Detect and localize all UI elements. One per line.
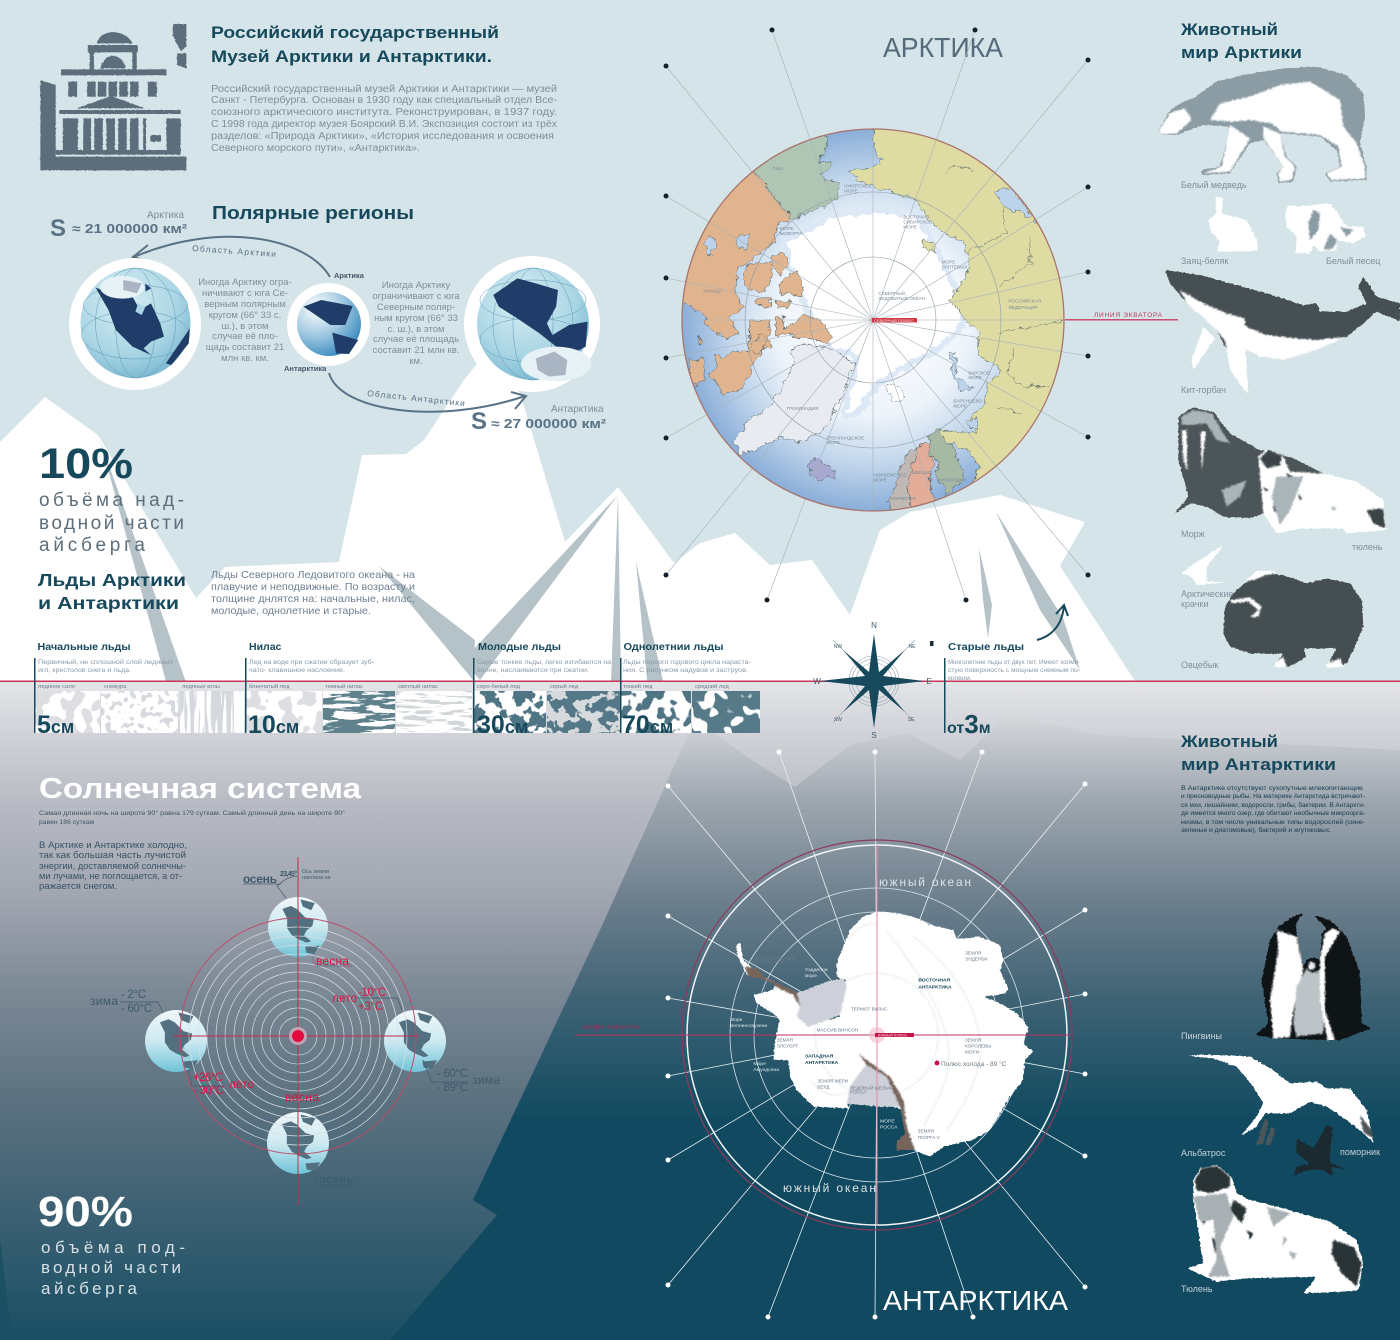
map radial end dots bbox=[664, 28, 1090, 602]
text: arctic boundary left: щадь составит 21 bbox=[206, 342, 284, 353]
heading: antarctic fauna: мир Антарктики bbox=[1181, 755, 1336, 774]
antarctic fauna text: ся мхи, лишайники, водоросли, грибы, бактерии. В Антаркти- bbox=[1181, 801, 1365, 809]
ice column: начальные льды: ледяные иглы bbox=[182, 684, 220, 690]
text: arctic boundary right: ным кругом (66° 33 bbox=[374, 313, 458, 324]
equator line label bbox=[1065, 312, 1178, 320]
map place labels: ВОСТОЧНО- bbox=[903, 214, 931, 219]
ice column: нилас: темный нилас bbox=[325, 683, 363, 690]
label: summer right: лето bbox=[332, 993, 357, 1005]
texture tile: ледяные иглы bbox=[180, 691, 244, 733]
arctic area figure: S bbox=[50, 215, 66, 242]
animal labels: arctic lower: Морж bbox=[1181, 529, 1205, 539]
label: spring bottom: весна bbox=[285, 1090, 319, 1104]
texture tile: средний лед bbox=[692, 691, 760, 733]
animal: arctic tern bbox=[1181, 544, 1235, 585]
ocean labels bbox=[783, 875, 971, 1195]
arctic area figure: Арктика bbox=[147, 210, 184, 221]
label: autumn top bbox=[243, 869, 332, 898]
background: sky above water bbox=[0, 0, 1400, 681]
label: winter right: - 60°C bbox=[437, 1068, 468, 1080]
ice column: молодые льды: 30см bbox=[477, 711, 528, 739]
antarctic title: АНТАРКТИКА bbox=[883, 1285, 1068, 1316]
globe: right bbox=[384, 1010, 446, 1072]
orbit rings bbox=[180, 918, 416, 1154]
map place labels: ЧУКОТСКОЕ bbox=[844, 184, 872, 189]
label: summer right: -10°C bbox=[358, 987, 386, 999]
stat: 90 percent below water bbox=[38, 1188, 185, 1298]
heading: arctic fauna: мир Арктики bbox=[1181, 43, 1302, 62]
map place labels: ЛАПТЕВЫХ bbox=[942, 264, 968, 269]
antarctic place labels: ЗЕМЛЯ bbox=[965, 1038, 981, 1043]
museum description: С 1998 года директор музея Боярский В.И. Экспозиция состоит из трёх bbox=[211, 119, 557, 130]
globe: antarctic view bbox=[464, 256, 600, 392]
antarctic place labels: Море bbox=[730, 1017, 743, 1023]
arctic map bbox=[653, 28, 1093, 602]
antarctic fauna text bbox=[1181, 785, 1365, 834]
globe: arctic view bbox=[69, 258, 201, 390]
solar text paragraph: энергии, доставляемой солнечны- bbox=[39, 861, 186, 872]
antarctic area figure bbox=[471, 404, 607, 435]
label: winter left: зима bbox=[90, 994, 118, 1008]
antarctic place labels: ПОЛУОСТРОВ bbox=[753, 959, 785, 964]
antarctic fauna text: зеленые и диатомовые), бактерий и жгутиковых. bbox=[1181, 826, 1331, 834]
ice column: начальные льды: 5см bbox=[37, 711, 74, 739]
map place labels: НОРВЕЖСКОЕ bbox=[873, 473, 907, 478]
stat: 10 percent above water: 10% bbox=[39, 440, 133, 488]
iceberg above water bbox=[0, 360, 1135, 690]
antarctic place labels: Уэдделла bbox=[805, 967, 828, 973]
label: winter right: зима bbox=[472, 1073, 500, 1087]
antarctic map bbox=[575, 750, 1088, 1320]
arrow: antarctic region bbox=[329, 373, 526, 412]
antarctic place labels: Море bbox=[753, 1061, 766, 1067]
animal labels: antarctic: Альбатрос bbox=[1181, 1148, 1226, 1158]
ice column: начальные льды: Начальные льды bbox=[38, 641, 131, 653]
ice column: нилас: 10см bbox=[248, 711, 299, 739]
stat: 10 percent above water: объёма над- bbox=[39, 490, 184, 511]
antarctic place labels: ЗЕМЛЯ bbox=[965, 950, 981, 955]
label: spring top: весна bbox=[316, 954, 349, 968]
animal: musk ox bbox=[1223, 571, 1363, 668]
map place labels bbox=[703, 166, 1041, 501]
animal: arctic fox bbox=[1285, 203, 1365, 253]
animal labels: antarctic: Пингвины bbox=[1181, 1031, 1222, 1041]
north pole marker: СЕВЕРНЫЙ ПОЛЮС bbox=[874, 318, 914, 323]
stat: 10 percent above water bbox=[39, 440, 184, 556]
antarctic place labels: ЗАПАДНАЯ bbox=[805, 1053, 834, 1059]
ice column: однолетние льды: Льды первого годового цикла нараста- bbox=[623, 659, 751, 666]
texture tile: снежура bbox=[101, 691, 178, 733]
label: summer left: - 30°C bbox=[193, 1085, 224, 1097]
map place labels: БОФОРТА bbox=[780, 231, 803, 236]
ice column: молодые льды: волне, наслаиваются при сжатии. bbox=[477, 667, 589, 674]
ice column: нилас: Лед на воде при сжатии образует зуб- bbox=[249, 658, 374, 666]
antarctic fauna text: и пресноводные рыбы. На материке Антарктида встречают- bbox=[1181, 792, 1365, 800]
animal labels: antarctic: Тюлень bbox=[1181, 1284, 1213, 1294]
ice column: нилас: блинчатый лед bbox=[249, 683, 290, 690]
arrow: old ice drift bbox=[1037, 605, 1068, 640]
map place labels: МОРЕ bbox=[873, 478, 887, 483]
antarctic place labels: Беллинсгаузена bbox=[730, 1023, 767, 1029]
antarctic place labels: МОРИ bbox=[965, 1049, 979, 1054]
label: summer right: +3°C bbox=[358, 1001, 383, 1013]
animal: seal bbox=[1187, 1165, 1363, 1293]
museum heading bbox=[211, 23, 499, 66]
arctic title: АРКТИКА bbox=[883, 32, 1003, 63]
antarctic place labels: БЕРД bbox=[817, 1084, 830, 1089]
ice column: нилас: чато- клавишное наслоение. bbox=[249, 667, 345, 674]
compass rose: NW bbox=[834, 644, 842, 650]
ice intro text: Льды Северного Ледовитого океана - на bbox=[211, 569, 415, 581]
antarctic place labels: море bbox=[805, 973, 817, 979]
ice column: старые льды: от3м bbox=[947, 709, 991, 739]
compass rose: N bbox=[871, 621, 877, 630]
label: autumn top: наклона на bbox=[302, 875, 332, 881]
ocean labels: южный океан bbox=[879, 875, 971, 889]
antarctic place labels: Амундсена bbox=[753, 1067, 779, 1073]
map place labels: БАРЕНЦЕВО bbox=[953, 399, 982, 404]
museum building icon bbox=[40, 24, 186, 170]
solar text small bbox=[39, 809, 345, 826]
map place labels: МОРЕ bbox=[844, 189, 858, 194]
museum description: разделов: «Природа Арктики», «История исследования и освоения bbox=[211, 131, 554, 142]
compass rose: S bbox=[871, 731, 877, 740]
globe: autumn top bbox=[268, 897, 328, 957]
animal labels: arctic upper: Заяц-беляк bbox=[1181, 256, 1228, 266]
text: arctic boundary right: ограничивают с юга bbox=[372, 291, 460, 302]
animal: albatross bbox=[1180, 1055, 1374, 1146]
animal labels: arctic lower bbox=[1181, 529, 1383, 670]
museum description: Российский государственный музей Арктики и Антарктики — музей bbox=[211, 84, 557, 95]
animal: arctic hare bbox=[1208, 197, 1258, 252]
heading: antarctic fauna bbox=[1180, 732, 1336, 774]
map grid and radial lines bbox=[666, 30, 1088, 600]
ice column: нилас bbox=[245, 641, 438, 739]
antarctic area figure: Антарктика bbox=[551, 404, 604, 415]
solar text small: Самая длинная ночь на широте 90° равна 179 суткам. Самый длинный день на широте 90° bbox=[39, 809, 345, 817]
map place labels: ШВЕЦИЯ bbox=[912, 470, 932, 475]
ocean labels: южный океан bbox=[783, 1181, 876, 1195]
arctic area figure: ≈ 21 000000 км² bbox=[72, 221, 188, 236]
heading: antarctic fauna: Животный bbox=[1180, 732, 1278, 751]
map place labels: МОРЕ bbox=[780, 226, 794, 231]
ice column: однолетние льды: Однолетнии льды bbox=[624, 641, 724, 653]
map radial lines bbox=[668, 752, 1085, 1317]
antarctic fauna text: В Антарктике отсутствуют сухопутные млекопитающие bbox=[1181, 785, 1363, 792]
antarctic place labels: КОРОЛЕВЫ bbox=[965, 1043, 991, 1048]
label: autumn top: 23,45° bbox=[280, 870, 297, 878]
globe: left bbox=[145, 1010, 207, 1072]
text: arctic boundary right: Иногда Арктику bbox=[382, 280, 450, 291]
map place labels: МОРЕ bbox=[942, 259, 955, 264]
animal labels: arctic upper: Белый медведь bbox=[1181, 180, 1247, 190]
ice intro text bbox=[211, 569, 415, 617]
text: arctic boundary right: км. bbox=[409, 356, 423, 367]
stat: 10 percent above water: водной части bbox=[39, 513, 184, 534]
orbit axes bbox=[173, 857, 419, 1205]
text: arctic boundary left bbox=[198, 277, 292, 364]
ice column: молодые льды: серо-белый лед bbox=[477, 683, 521, 690]
ice intro text: толщине днлятся на: начальные, нилас, bbox=[211, 593, 415, 605]
texture tile: темный нилас bbox=[323, 691, 395, 733]
animal labels: arctic upper: Белый песец bbox=[1326, 256, 1380, 266]
text: arctic boundary right: случае её площадь bbox=[373, 334, 459, 345]
text: arctic boundary left: Иногда Арктику огра- bbox=[198, 277, 292, 288]
label: summer left: +26°C bbox=[193, 1072, 223, 1084]
label: spring bottom bbox=[283, 1090, 319, 1113]
antarctic area figure: S bbox=[471, 408, 487, 435]
equator label south: ЛИНИЯ ЭКВАТОРА bbox=[582, 1025, 640, 1031]
antarctic place labels: ГЕОРГА V bbox=[918, 1135, 941, 1140]
map place labels: МОРЕ bbox=[903, 224, 917, 229]
text: arctic boundary right: составит 21 млн кв. bbox=[373, 345, 459, 356]
map place labels: КАНАДА bbox=[703, 289, 723, 294]
map place labels: ЛЕДОВИТЫЙ ОКЕАН bbox=[878, 294, 925, 301]
ice column: начальные льды: Первичный, не сплошной слой ледяных bbox=[38, 658, 174, 666]
museum description: Северного морского пути», «Антарктика». bbox=[211, 143, 420, 154]
map place labels: ФИНЛЯНДИЯ bbox=[937, 478, 967, 483]
text: arctic boundary right: Северным поляр- bbox=[377, 302, 455, 313]
animal labels: arctic upper bbox=[1181, 180, 1380, 395]
antarctic area figure: ≈ 27 000000 км² bbox=[491, 416, 607, 431]
animal labels: arctic lower: тюлень bbox=[1352, 542, 1383, 552]
ice column: однолетние льды: 70см bbox=[622, 711, 673, 739]
stat: 10 percent above water: айсберга bbox=[39, 535, 145, 556]
map place labels: СИБИРСКОЕ bbox=[903, 219, 932, 224]
ice column: старые льды: стую поверхность с мощным снежным по- bbox=[948, 667, 1080, 674]
compass rose: NE bbox=[909, 644, 916, 650]
arctic area figure bbox=[50, 210, 188, 242]
heading: ice: Льды Арктики bbox=[38, 570, 186, 590]
map radial end dots bbox=[666, 750, 1088, 1320]
animal labels: arctic lower: крачки bbox=[1181, 599, 1208, 609]
text: arctic boundary left: ничивают с юга Се- bbox=[202, 288, 288, 299]
ice column: молодые льды: Молодые льды bbox=[478, 641, 561, 653]
label: winter left: - 2°C bbox=[121, 989, 146, 1001]
antarctic place labels: РОССА bbox=[850, 1090, 867, 1095]
ice column: начальные льды bbox=[34, 641, 220, 739]
map place labels: ГРЕНЛАНДСКОЕ bbox=[827, 435, 864, 440]
antarctica continent bbox=[736, 912, 1033, 1157]
label: winter right bbox=[423, 1060, 500, 1094]
side label: antarctic: Антарктика bbox=[284, 364, 327, 373]
solar text paragraph: ми лучами, не поглощается, а от- bbox=[39, 871, 182, 882]
text: arctic boundary left: млн кв. км. bbox=[221, 353, 269, 364]
stat: 90 percent below water: айсберга bbox=[41, 1279, 138, 1298]
antarctic place labels: ЗЕМЛЯ МЕРИ bbox=[817, 1079, 848, 1084]
arctic animals lower bbox=[1173, 407, 1387, 668]
equator line label: ЛИНИЯ ЭКВАТОРА bbox=[1094, 312, 1163, 319]
heading: arctic fauna: Животный bbox=[1180, 20, 1278, 39]
solar text small: равен 186 суткам bbox=[39, 819, 95, 826]
ice column: молодые льды bbox=[473, 641, 611, 739]
antarctic place labels: ЗЕМЛЯ bbox=[777, 1038, 793, 1043]
solar text paragraph bbox=[39, 840, 187, 892]
texture tile: серо-белый лед bbox=[474, 691, 546, 733]
animal: walrus bbox=[1173, 407, 1323, 518]
antarctic place labels: ЛЕДОВЫЙ ШЕЛЬФ bbox=[850, 1084, 892, 1091]
antarctic place labels: ВОСТОЧНАЯ bbox=[918, 978, 951, 984]
antarctic fauna text: де имеется много озер, где обитают необычные микроорга- bbox=[1181, 809, 1365, 817]
museum description: союзного арктического института. Реконструирован, в 1937 году. bbox=[211, 107, 557, 118]
water line bbox=[0, 680, 1400, 682]
antarctic place labels: ЭНДЕРБИ bbox=[965, 957, 987, 962]
texture tile: блинчатый лед bbox=[246, 691, 322, 733]
ice column: однолетние льды: тонкий лед bbox=[623, 683, 653, 690]
museum description: Санкт - Петербурга. Основан в 1930 году как специальный отдел Все- bbox=[211, 94, 557, 106]
arc label: antarctic region: Область Антарктики bbox=[367, 388, 466, 408]
globe: centre earth bbox=[287, 283, 370, 366]
map place labels: КАРСКОЕ bbox=[968, 370, 990, 375]
texture tile: серый лед bbox=[547, 691, 620, 733]
label: autumn top: Ось земли bbox=[302, 869, 329, 875]
antarctic place labels: ТЕРМОТ ВИЛАС bbox=[851, 1007, 888, 1012]
label: winter left bbox=[90, 989, 163, 1015]
iceberg shadow beams bbox=[100, 440, 1080, 690]
animal labels: arctic lower: Овцебык bbox=[1181, 660, 1218, 670]
label: summer right bbox=[332, 987, 402, 1013]
antarctic place labels: МОРЕ bbox=[880, 1118, 895, 1124]
compass rose bbox=[813, 621, 932, 740]
animal labels: arctic upper: Кит-горбач bbox=[1181, 385, 1226, 395]
season orbit diagram bbox=[90, 857, 500, 1205]
arrow: arctic region bbox=[133, 237, 330, 277]
south pole marker: ЮЖНЫЙ ПОЛЮС bbox=[878, 1034, 908, 1038]
animal: skua bbox=[1293, 1125, 1353, 1177]
compass rose: SE bbox=[908, 717, 915, 723]
background: water gradient and submerged iceberg bbox=[0, 681, 1400, 1340]
text: arctic boundary right bbox=[372, 280, 460, 367]
antarctic place labels: АНТАРКТИКА bbox=[918, 984, 952, 990]
solar text paragraph: В Арктике и Антарктике холодно, bbox=[39, 840, 187, 851]
label: winter left: - 60°C bbox=[121, 1003, 152, 1015]
ice column: молодые льды: серый лед bbox=[550, 683, 579, 690]
heading: solar system: Солнечная система bbox=[39, 773, 362, 805]
museum heading: Российский государственный bbox=[211, 23, 499, 42]
animal labels: antarctic: поморник bbox=[1340, 1147, 1380, 1157]
label: summer left bbox=[188, 1070, 254, 1097]
pole cross lines bbox=[575, 845, 1070, 1225]
heading: ice bbox=[38, 570, 186, 613]
heading: arctic fauna bbox=[1180, 20, 1302, 62]
ice column: однолетние льды: ния. С рисунком надувов и заструов. bbox=[623, 667, 748, 674]
antarctic place labels: ЗЕМЛЯ bbox=[918, 1129, 934, 1134]
ice column: однолетние льды bbox=[620, 641, 751, 739]
compass rose: SW bbox=[834, 717, 842, 723]
map circles bbox=[682, 840, 1072, 1230]
museum description bbox=[211, 84, 557, 154]
ice column: старые льды bbox=[944, 641, 1080, 739]
map place labels: ФЕДЕРАЦИЯ bbox=[1008, 305, 1037, 310]
ice column: начальные льды: игл, крестолов снега и льда. bbox=[38, 667, 131, 674]
compass rose: W bbox=[813, 677, 821, 686]
antarctic fauna text: низмы, в том числе уникальные типы водорослей (сине- bbox=[1181, 818, 1365, 826]
label: winter right: - 89°C bbox=[437, 1082, 468, 1094]
marker: small square bbox=[930, 641, 934, 646]
antarctic place labels: ЭЛСУОРТ bbox=[777, 1044, 798, 1049]
text: arctic boundary left: случае её пло- bbox=[212, 331, 278, 342]
label: autumn top: осень bbox=[243, 872, 277, 886]
map place labels: НОРВЕГИЯ bbox=[890, 496, 916, 501]
stat: 90 percent below water: водной части bbox=[41, 1258, 181, 1277]
solar text paragraph: ражается снегом. bbox=[39, 881, 117, 892]
arc label: arctic region: Область Арктики bbox=[192, 243, 277, 259]
animal: penguins bbox=[1255, 913, 1372, 1040]
map place labels: МОРЕ bbox=[968, 375, 982, 380]
side label: arctic: Арктика bbox=[334, 271, 365, 280]
antarctic place labels bbox=[730, 950, 991, 1140]
ice column: нилас: Нилас bbox=[249, 641, 282, 653]
ice column: нилас: светлый нилас bbox=[398, 683, 438, 690]
animal labels: antarctic bbox=[1181, 1031, 1380, 1294]
polar regions heading: Полярные регионы bbox=[212, 203, 414, 223]
animal: humpback whale bbox=[1165, 270, 1400, 395]
ice intro text: плавучие и неподвижные. По возрасту и bbox=[211, 581, 415, 593]
globe: bottom bbox=[267, 1112, 329, 1174]
label: autumn bottom: осень bbox=[319, 1172, 353, 1186]
compass rose: E bbox=[926, 677, 932, 686]
animal labels: arctic lower: Арктические bbox=[1181, 589, 1233, 599]
animal: harp seal bbox=[1258, 449, 1387, 533]
text: arctic boundary left: ш.), в этом bbox=[221, 321, 269, 332]
stat: 90 percent below water: объёма под- bbox=[41, 1238, 185, 1257]
antarctic place labels: АНТАРКТИКА bbox=[805, 1060, 839, 1066]
map place labels: США bbox=[773, 166, 784, 171]
ice column: старые льды: кровом. bbox=[948, 675, 972, 682]
texture tile: светлый нилас bbox=[396, 691, 472, 733]
text: arctic boundary left: кругом (66° 33 с. bbox=[209, 310, 281, 321]
antarctic place labels: АНТАРКТИЧЕСКИЙ bbox=[753, 954, 796, 961]
map place labels: МОРЕ bbox=[827, 440, 840, 445]
map place labels: СЕВЕРНЫЙ bbox=[878, 289, 905, 296]
antarctic place labels: МАССИВ ВИНСОН bbox=[817, 1027, 858, 1032]
ice column: начальные льды: снежура bbox=[104, 684, 127, 690]
animal: polar bear bbox=[1158, 67, 1367, 183]
map land masses bbox=[684, 130, 1064, 510]
map place labels: РОССИЙСКАЯ bbox=[1008, 296, 1041, 303]
ice column: старые льды: Многолетние льды от двух лет. Имеют холми- bbox=[948, 659, 1080, 666]
antarctic place labels: РОССА bbox=[880, 1124, 898, 1130]
sun bbox=[289, 1027, 307, 1045]
museum heading: Музей Арктики и Антарктики. bbox=[211, 47, 492, 66]
texture tile: ледяное сало bbox=[35, 691, 100, 733]
ice column: старые льды: Старые льды bbox=[948, 641, 1024, 653]
stat: 90 percent below water: 90% bbox=[38, 1188, 133, 1236]
text: arctic boundary right: с. ш.), в этом bbox=[387, 324, 445, 335]
ice column: молодые льды: Серые тонкие льды, легко изгибаются на bbox=[477, 658, 611, 666]
antarctic animals bbox=[1180, 913, 1374, 1293]
south pole marker bbox=[875, 1033, 914, 1038]
ice column: однолетние льды: средний лед bbox=[695, 683, 729, 690]
arctic animals bbox=[1158, 67, 1400, 395]
heading: ice: и Антарктики bbox=[38, 593, 179, 613]
text: arctic boundary left: верным полярным bbox=[204, 299, 286, 310]
cold pole marker: Полюс холода - 89 °С bbox=[941, 1060, 1007, 1068]
ice intro text: молодые, однолетние и старые. bbox=[211, 605, 371, 617]
ice column: начальные льды: ледяное сало bbox=[38, 684, 75, 690]
solar text paragraph: так как большая часть лучистой bbox=[39, 850, 186, 861]
map place labels: МОРЕ bbox=[953, 404, 967, 409]
texture tile: тонкий лед bbox=[621, 691, 691, 733]
map place labels: ГРИНЛАНДИЯ bbox=[787, 406, 818, 411]
label: summer left: лето bbox=[229, 1079, 254, 1091]
